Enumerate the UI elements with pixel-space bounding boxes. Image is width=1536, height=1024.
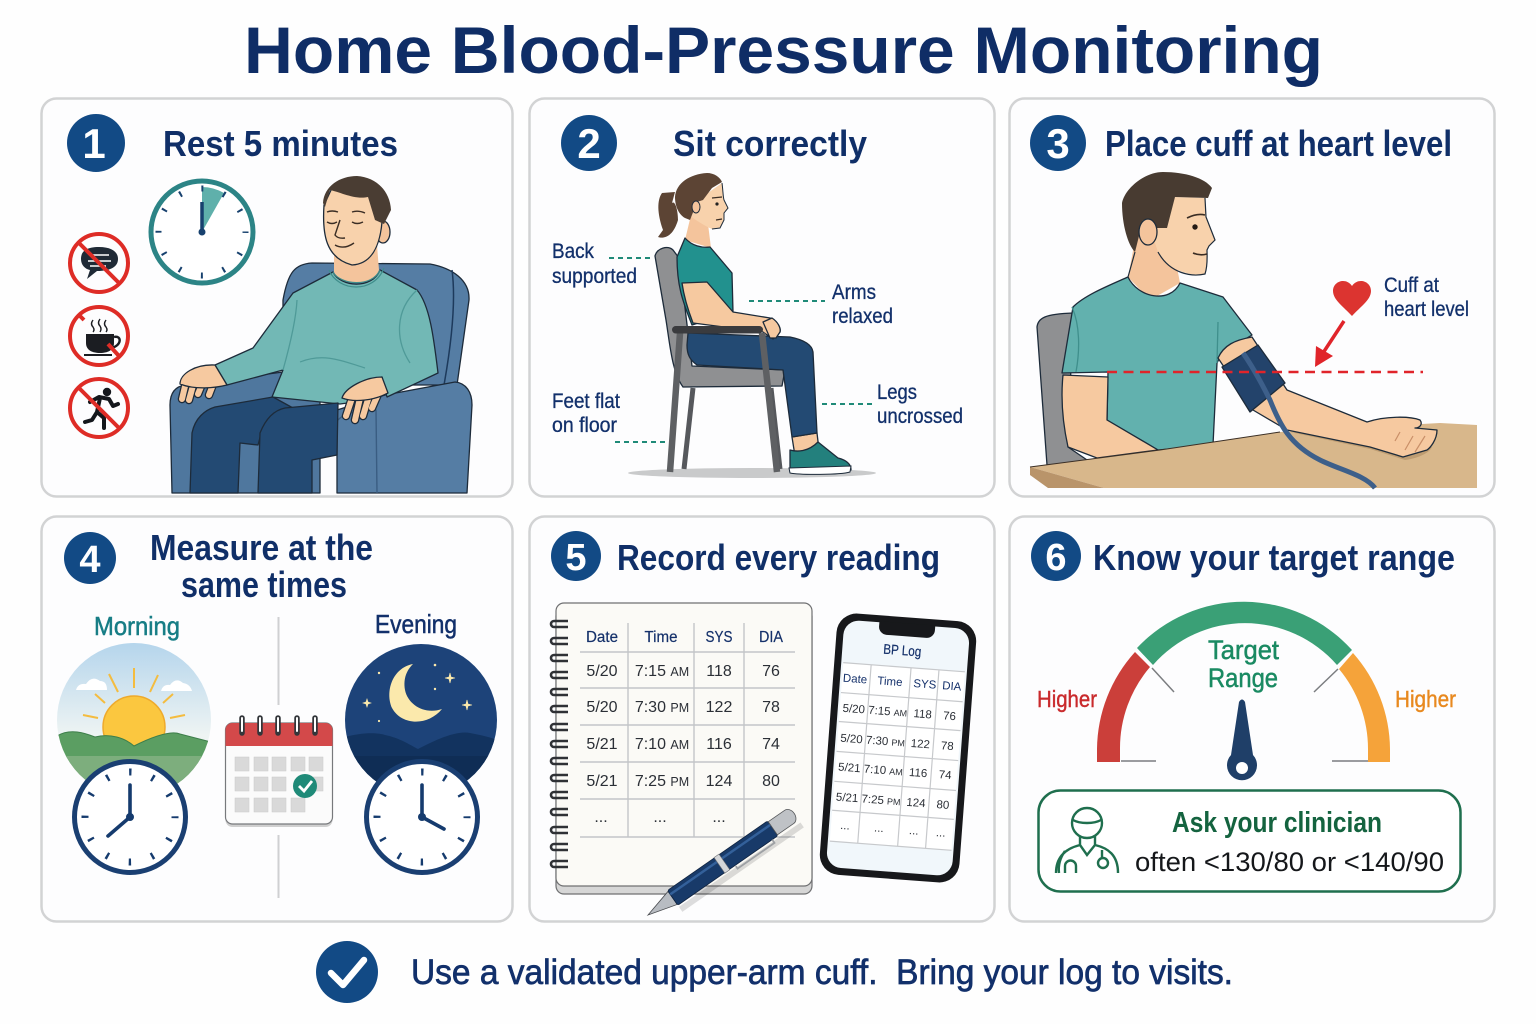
notebook table: 124 xyxy=(706,773,732,790)
text: ask your clinician: Ask your clinician xyxy=(1172,807,1382,839)
step number 5 xyxy=(551,531,601,581)
neck and head xyxy=(334,245,379,283)
legs xyxy=(190,397,293,493)
notebook table: 5/21 xyxy=(586,773,618,790)
phone table: 76 xyxy=(943,710,956,723)
phone table: 5/20 xyxy=(840,733,863,746)
panel 6: know your target range xyxy=(1010,516,1494,922)
floor shadow xyxy=(628,468,876,478)
footer tip xyxy=(316,941,1233,1003)
icon: clinician xyxy=(1056,808,1118,873)
notebook table xyxy=(580,623,795,837)
phone table: ... xyxy=(909,825,919,838)
phone table: Time xyxy=(877,675,903,689)
step number 6: 6 xyxy=(1045,537,1067,579)
label: higher left: Higher xyxy=(1037,686,1097,712)
label: feet flat on floor xyxy=(552,390,665,442)
label: arms relaxed xyxy=(749,281,893,328)
evening clock 4:00 xyxy=(366,762,478,872)
hands xyxy=(180,365,388,420)
text: target values: often <130/80 or <140/90 xyxy=(1135,847,1444,877)
icon: clock with 5 minute wedge xyxy=(151,181,253,283)
notebook table: 7:25 PM xyxy=(635,773,689,790)
chair arm and front legs xyxy=(670,318,780,472)
phone table: 116 xyxy=(909,767,928,780)
heading: place cuff at heart level: Place cuff at heart level xyxy=(1105,123,1452,164)
heading: rest 5 minutes: Rest 5 minutes xyxy=(163,123,398,164)
label: feet flat on floor: on floor xyxy=(552,414,617,437)
heart-level dashed line xyxy=(1107,371,1423,373)
notebook table: 5/21 xyxy=(586,736,618,753)
notebook table: 7:30 PM xyxy=(635,699,689,716)
step number 4 xyxy=(64,532,116,584)
person relaxing in armchair xyxy=(170,176,472,493)
callout: ask your clinician xyxy=(1038,790,1460,892)
chair back xyxy=(1037,313,1090,465)
heading: measure at the same times: Measure at the xyxy=(150,527,373,568)
step number 2: 2 xyxy=(577,120,601,167)
notebook table: 78 xyxy=(762,699,780,716)
title: Home Blood-Pressure Monitoring xyxy=(244,13,1323,87)
notebook table: 122 xyxy=(706,699,732,716)
notebook table: DIA xyxy=(759,629,784,646)
notebook table: 7:10 AM xyxy=(635,736,689,753)
notebook table: ... xyxy=(653,809,667,826)
label: target range: Range xyxy=(1208,663,1278,693)
seated woman xyxy=(658,173,851,474)
label: cuff at heart level xyxy=(1384,274,1469,321)
icon: no coffee xyxy=(70,307,128,365)
phone table: 122 xyxy=(910,738,930,751)
notebook table: Date xyxy=(586,629,618,646)
phone table: ... xyxy=(935,827,946,840)
heading: measure at the same times xyxy=(150,527,373,605)
icon: no running xyxy=(70,379,128,437)
label: arms relaxed: relaxed xyxy=(832,305,893,328)
heading: measure at the same times: same times xyxy=(181,564,347,605)
spiral binding xyxy=(551,621,568,867)
panel 2: sit correctly xyxy=(530,98,994,496)
phone table: 78 xyxy=(940,740,954,753)
chair xyxy=(655,248,785,469)
needle xyxy=(1227,700,1257,780)
divider xyxy=(278,617,280,898)
cuff tube xyxy=(1243,353,1375,488)
label: target range: Target xyxy=(1208,635,1279,665)
notebook table: 80 xyxy=(762,773,780,790)
label: legs uncrossed: uncrossed xyxy=(877,405,963,428)
arrow to cuff level xyxy=(1315,321,1344,367)
label: cuff at heart level: heart level xyxy=(1384,298,1469,321)
phone table: 7:15 AM xyxy=(868,705,908,720)
panel 5: record every reading xyxy=(530,516,994,929)
notebook table: ... xyxy=(594,809,608,826)
gauge xyxy=(1097,602,1390,780)
phone table: SYS xyxy=(913,678,937,692)
phone table: 124 xyxy=(906,797,927,810)
phone table: 5/20 xyxy=(842,703,865,716)
phone table: 80 xyxy=(936,799,950,812)
label: cuff at heart level: Cuff at xyxy=(1384,274,1439,297)
panel 1: rest 5 minutes xyxy=(42,98,512,496)
label: legs uncrossed: Legs xyxy=(877,381,917,404)
phone table: 118 xyxy=(913,708,932,721)
step number 2 xyxy=(561,115,617,171)
phone table: 7:10 AM xyxy=(863,764,903,778)
notebook table: Time xyxy=(644,629,678,646)
heading: know your target range: Know your target range xyxy=(1093,537,1455,578)
label: legs uncrossed xyxy=(822,381,963,428)
icon: heart xyxy=(1333,281,1371,316)
phone table: 7:30 PM xyxy=(865,735,905,749)
phone table: 7:25 PM xyxy=(861,793,901,808)
phone table: 5/21 xyxy=(838,762,861,775)
label: higher right: Higher xyxy=(1395,686,1456,712)
icon: check badge xyxy=(316,941,378,1003)
evening scene xyxy=(345,644,497,782)
icon: calendar xyxy=(226,718,332,827)
label: back supported xyxy=(552,240,650,288)
morning clock 7:00 xyxy=(74,762,186,872)
notebook table: SYS xyxy=(706,629,732,646)
step number 3 xyxy=(1030,115,1086,171)
heading: record every reading: Record every reading xyxy=(617,537,940,578)
table xyxy=(1030,423,1477,488)
phone table xyxy=(830,663,965,850)
phone table: ... xyxy=(840,820,850,833)
notebook table: 5/20 xyxy=(586,699,618,716)
notebook table: 76 xyxy=(762,663,780,680)
notebook table: 118 xyxy=(706,663,732,680)
step number 6 xyxy=(1031,531,1081,581)
phone table: 5/21 xyxy=(835,792,859,805)
pen xyxy=(643,806,804,929)
arm, hand and cuff xyxy=(1218,337,1437,457)
phone table: DIA xyxy=(942,680,962,694)
heading: sit correctly: Sit correctly xyxy=(673,123,867,164)
step number 1 xyxy=(67,114,125,172)
icon: no talking xyxy=(70,234,128,292)
step number 3: 3 xyxy=(1046,120,1070,167)
step number 1: 1 xyxy=(82,120,106,167)
step number 5: 5 xyxy=(565,537,587,579)
seated man torso and head xyxy=(1062,172,1252,458)
label: feet flat on floor: Feet flat xyxy=(552,390,620,413)
phone heading: BP Log xyxy=(883,641,922,659)
phone table: Date xyxy=(842,673,868,686)
notebook table: 116 xyxy=(706,736,732,753)
phone with BP log xyxy=(818,612,978,884)
text: validated cuff reminder: Use a validated upper-arm cuff. Bring your log to visits. xyxy=(411,953,1233,992)
label: morning: Morning xyxy=(94,611,180,641)
notebook table: 7:15 AM xyxy=(635,663,689,680)
label: evening: Evening xyxy=(375,609,457,639)
panel 3: place cuff at heart level xyxy=(1010,98,1494,496)
notebook table: ... xyxy=(712,809,726,826)
label: arms relaxed: Arms xyxy=(832,281,876,304)
phone table: ... xyxy=(874,822,884,835)
label: back supported: Back xyxy=(552,240,594,263)
label: back supported: supported xyxy=(552,265,637,288)
phone table: 74 xyxy=(938,769,952,782)
torso sweater xyxy=(215,270,438,404)
notebook xyxy=(551,603,812,894)
morning scene xyxy=(57,643,211,784)
notebook table: 74 xyxy=(762,736,780,753)
step number 4: 4 xyxy=(79,539,101,581)
label: target range xyxy=(1208,635,1279,693)
panel 4: measure at the same times xyxy=(42,516,512,922)
notebook table: 5/20 xyxy=(586,663,618,680)
